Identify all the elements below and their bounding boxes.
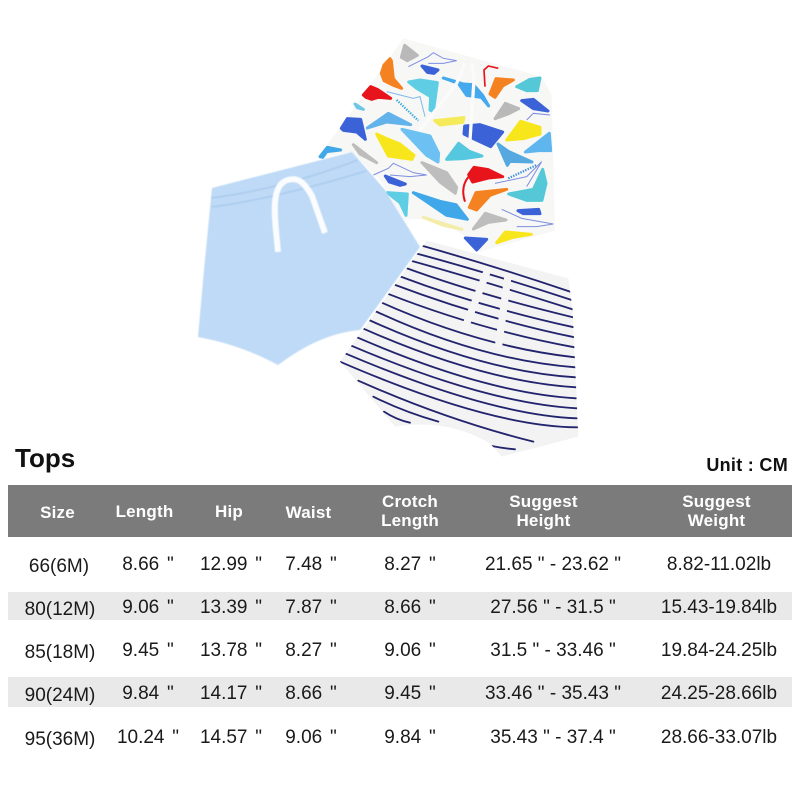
table row: 80(12M): 13.39 ": [200, 597, 262, 618]
table row: 80(12M): 9.06 ": [122, 597, 174, 618]
product photo: navy striped shorts: [340, 241, 578, 457]
table row: 80(12M): 7.87 ": [285, 597, 337, 618]
table header: Waist: [286, 503, 331, 522]
table row: 80(12M): 27.56 " - 31.5 ": [490, 597, 616, 618]
table row: 66(6M): 8.66 ": [122, 554, 174, 575]
table row: 85(18M): 9.45 ": [122, 640, 174, 661]
table row: 85(18M): 85(18M): [25, 642, 95, 663]
table row: 85(18M): [25, 640, 777, 663]
table row: 85(18M): 9.06 ": [384, 640, 436, 661]
table row: 66(6M): 66(6M): [29, 556, 89, 577]
table header: Hip: [215, 502, 243, 521]
table row: 66(6M): 7.48 ": [285, 554, 337, 575]
table row: 95(36M): [25, 727, 777, 750]
table row: 90(24M): 9.84 ": [122, 683, 174, 704]
table row: 66(6M): 8.82-11.02lb: [667, 554, 771, 575]
table row: 90(24M): 33.46 " - 35.43 ": [485, 683, 621, 704]
table row: 66(6M): 12.99 ": [200, 554, 262, 575]
table row: 80(12M): 80(12M): [25, 599, 95, 620]
table header: Weight: [688, 511, 745, 530]
drawstring: [275, 179, 325, 252]
table header: Size: [40, 503, 75, 522]
table row: 80(12M): 8.66 ": [384, 597, 436, 618]
table row: 66(6M): 8.27 ": [384, 554, 436, 575]
table row: 95(36M): 28.66-33.07lb: [661, 727, 777, 748]
table row: 66(6M): 21.65 " - 23.62 ": [485, 554, 621, 575]
table row: 80(12M): 15.43-19.84lb: [661, 597, 777, 618]
table header: Height: [516, 511, 571, 530]
table row: 85(18M): 13.78 ": [200, 640, 262, 661]
unit label: Unit : CM: [706, 455, 788, 475]
title: Tops: Tops: [15, 443, 75, 473]
table row: 95(36M): 14.57 ": [200, 727, 262, 748]
table row: 85(18M): 31.5 " - 33.46 ": [490, 640, 616, 661]
table row: 95(36M): 35.43 " - 37.4 ": [490, 727, 616, 748]
table header: [8, 485, 792, 537]
table header: Crotch: [382, 492, 438, 511]
table row: 90(24M): 14.17 ": [200, 683, 262, 704]
table row: 95(36M): 95(36M): [25, 729, 95, 750]
table row: 90(24M): 24.25-28.66lb: [661, 683, 777, 704]
table header: Length: [116, 502, 173, 521]
product photo: dinosaur print shorts: [318, 38, 555, 252]
table row: 95(36M): 10.24 ": [117, 727, 179, 748]
table row: 95(36M): 9.06 ": [285, 727, 337, 748]
table row: 90(24M): 90(24M): [25, 685, 95, 706]
table row: 90(24M): 9.45 ": [384, 683, 436, 704]
table row: 85(18M): 19.84-24.25lb: [661, 640, 777, 661]
product photo: light blue shorts: [198, 152, 420, 365]
table row: 80(12M): [8, 592, 792, 620]
table row: 66(6M): [29, 554, 771, 577]
table row: 95(36M): 9.84 ": [384, 727, 436, 748]
drawstring: [463, 268, 508, 347]
table header: Length: [381, 511, 439, 530]
table header: Suggest: [509, 492, 578, 511]
table header: Suggest: [682, 492, 751, 511]
table row: 90(24M): 8.66 ": [285, 683, 337, 704]
table row: 90(24M): [8, 677, 792, 707]
table row: 85(18M): 8.27 ": [285, 640, 337, 661]
